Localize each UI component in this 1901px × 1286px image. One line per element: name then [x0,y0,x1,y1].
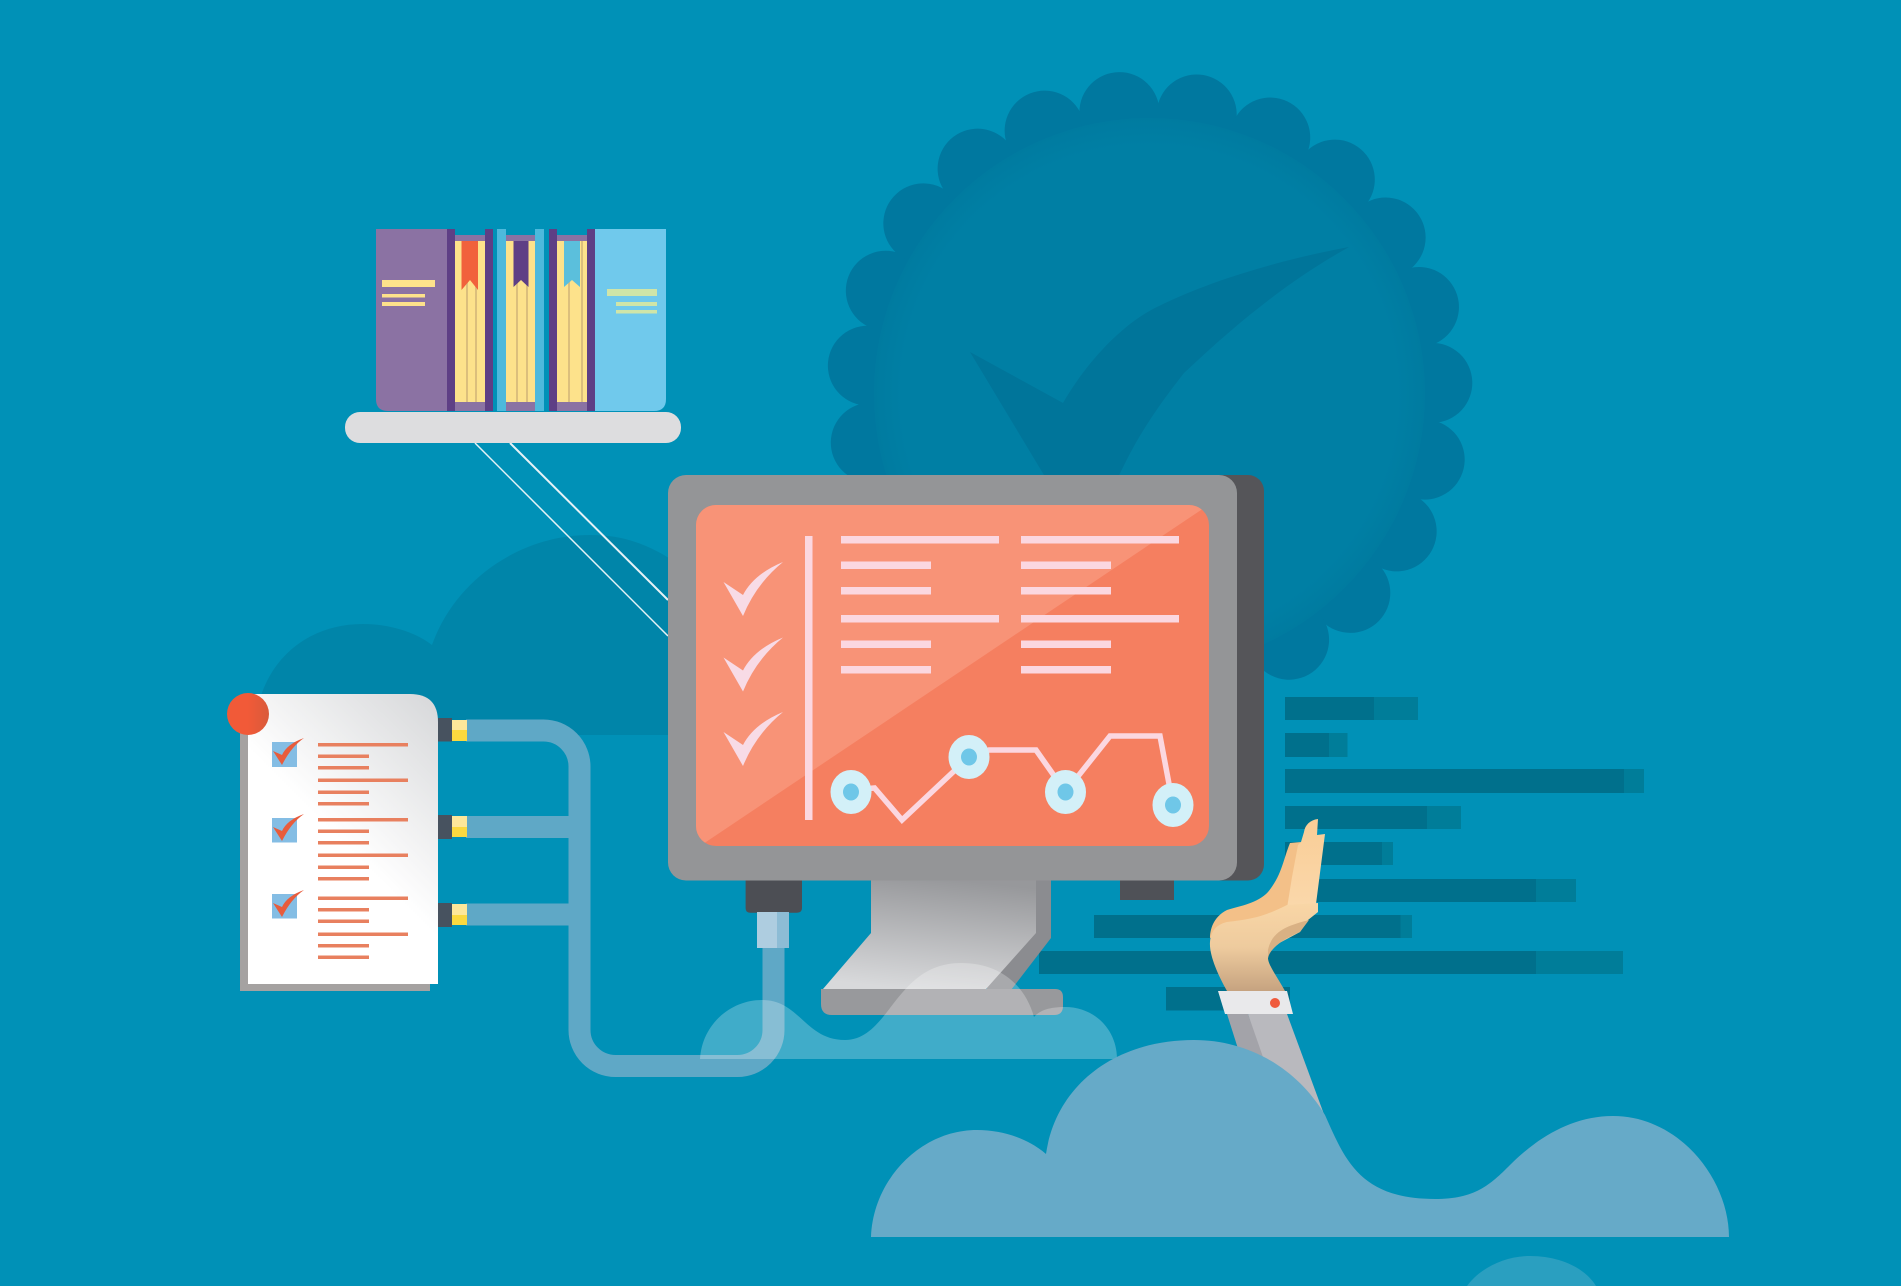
bar 6 [1285,879,1576,902]
hand with sleeve [1210,819,1325,1117]
badge disc [874,118,1425,669]
checklist document [227,693,467,991]
book: pages with red bookmark [447,229,493,411]
monitor back edge [1180,475,1264,880]
bar 3 [1285,769,1644,793]
small bottom cloud [1467,1256,1596,1286]
large foreground cloud [871,1040,1729,1237]
background cloud left [255,535,680,735]
translucent cloud under monitor [700,963,1117,1059]
checklist text lines [318,743,408,959]
palm shadow [1268,920,1309,958]
red pin [227,693,269,735]
monitor [668,475,1264,1015]
stand [821,880,1063,1015]
badge scalloped edge [824,68,1474,717]
palm [1210,903,1318,991]
background badge with check mark [824,68,1474,717]
connector 1 [438,718,467,742]
book: pages with blue bookmark [549,229,595,411]
book: pages with purple bookmark [497,229,544,411]
bar 1 [1285,697,1418,720]
check box 2 [272,814,304,842]
bookshelf [345,229,681,443]
screen [690,500,1209,846]
book: purple cover [376,229,447,411]
bar 5 [1285,842,1393,865]
left port plug [746,880,802,948]
badge check mark [970,247,1349,480]
paper sheet [248,694,438,984]
bar 2 [1285,733,1348,757]
line chart [830,735,1194,827]
screen divider [805,536,812,820]
check box 3 [272,890,304,918]
front fingers [1287,819,1325,908]
bar 4 [1285,806,1461,829]
right foot [1120,880,1174,900]
check box 1 [272,738,304,767]
bar 7 [1094,915,1412,938]
connector 3 [438,903,467,927]
connecting pipes [466,730,774,1066]
screen text lines [841,536,1179,674]
screen check marks [724,562,783,766]
shelf [345,412,681,443]
bar 8 [1039,951,1623,974]
shelf bracket lines [475,443,668,636]
shirt cuff [1218,991,1293,1014]
monitor bezel [668,475,1237,880]
sleeve [1227,1014,1325,1117]
back fingers [1210,842,1301,938]
book: light blue cover [595,229,666,411]
connector 2 [438,815,467,839]
data bars right [1039,697,1644,1010]
paper shadow [240,712,430,991]
bar 9 [1166,987,1290,1010]
